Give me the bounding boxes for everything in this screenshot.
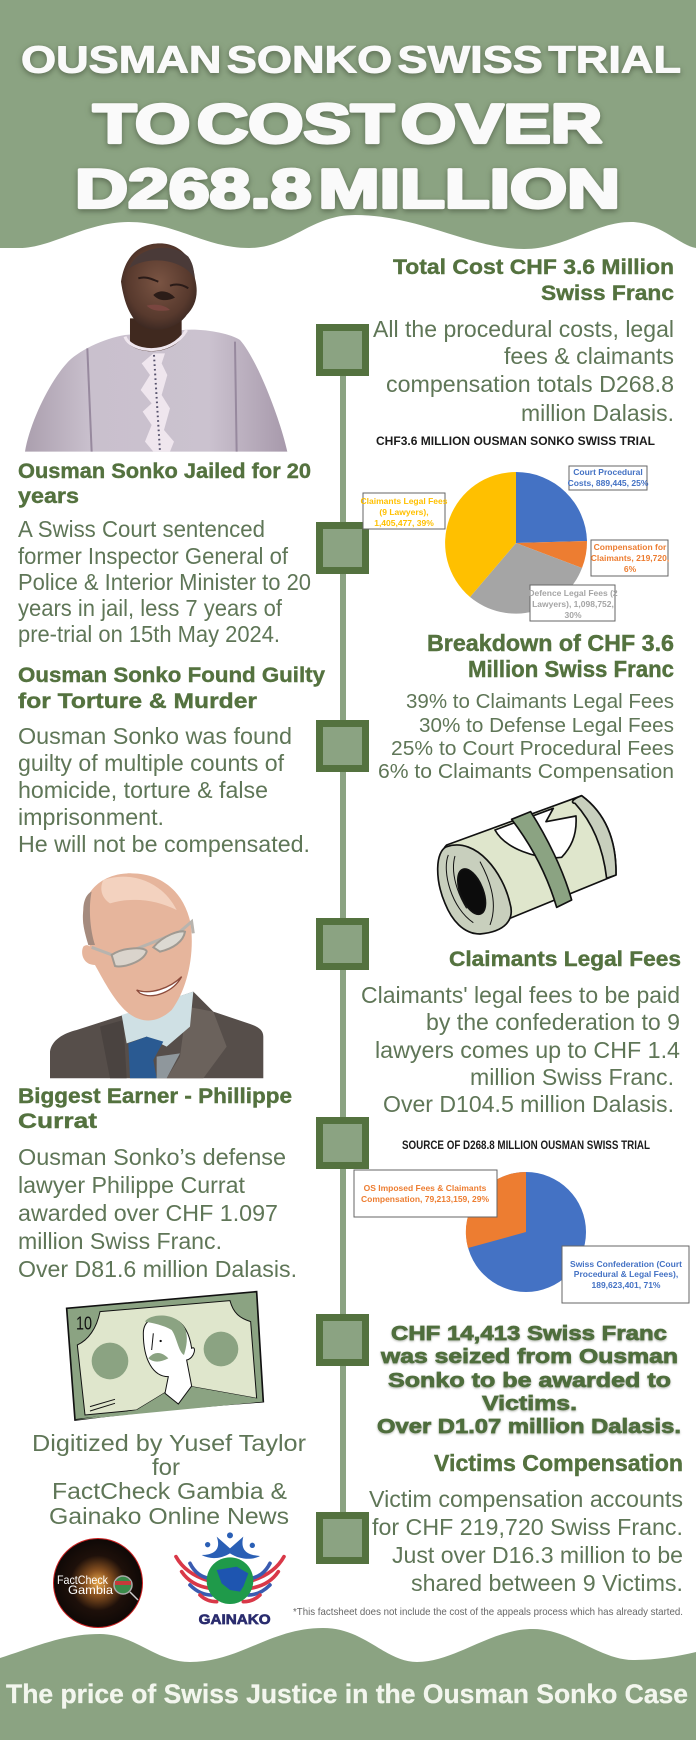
pie chart: CHF3.6 million breakdown: Claimants, 219,720, <box>591 553 669 563</box>
section: jailed: years in jail, less 7 years of <box>18 595 283 621</box>
pie chart: CHF3.6 million breakdown: (9 Lawyers), <box>379 507 429 517</box>
section: breakdown: Million Swiss Franc <box>468 656 674 682</box>
section: claimants legal fees: Claimants' legal fees to be paid <box>361 982 680 1008</box>
section: claimants legal fees: Over D104.5 million Dalasis. <box>383 1091 674 1117</box>
section: biggest earner: Biggest Earner - Phillippe <box>18 1085 292 1108</box>
section: jailed: A Swiss Court sentenced <box>18 516 265 542</box>
section: found guilty <box>18 664 325 857</box>
pie chart: source of funds: Compensation, 79,213,159, 29% <box>361 1194 489 1204</box>
pie chart: CHF3.6 million breakdown: Defence Legal Fees (2 <box>528 588 618 598</box>
pie chart: CHF3.6 million breakdown: 6% <box>624 564 637 574</box>
section: found guilty: for Torture & Murder <box>18 690 257 713</box>
title: TO COST OVER <box>93 92 602 154</box>
footer text: The price of Swiss Justice in the Ousman Sonko Case <box>6 1679 688 1709</box>
section: biggest earner: Currat <box>18 1110 97 1133</box>
header banner <box>0 0 696 249</box>
timeline <box>320 328 366 1560</box>
section: breakdown <box>378 630 674 783</box>
pie chart: CHF3.6 million breakdown: 30% <box>564 610 582 620</box>
section: total cost: compensation totals D268.8 <box>386 371 674 397</box>
section: jailed: Ousman Sonko Jailed for 20 <box>18 460 311 483</box>
section: breakdown: 6% to Claimants Compensation <box>378 760 674 783</box>
callout: seized funds: Over D1.07 million Dalasis. <box>377 1416 681 1438</box>
pie chart: source of funds <box>354 1138 689 1303</box>
section: claimants legal fees: Claimants Legal Fees <box>449 948 681 971</box>
section: total cost <box>373 256 674 426</box>
section: jailed <box>18 460 311 647</box>
pie chart: CHF3.6 million breakdown: Lawyers), 1,098,752, <box>532 599 614 609</box>
callout: seized funds <box>377 1323 681 1438</box>
section: victims compensation: for CHF 219,720 Swiss Franc. <box>372 1514 683 1540</box>
pie chart: CHF3.6 million breakdown <box>361 434 669 621</box>
photo: Ousman Sonko <box>25 243 287 452</box>
pie chart: CHF3.6 million breakdown: Compensation for <box>594 542 667 552</box>
callout: seized funds: CHF 14,413 Swiss Franc <box>391 1323 667 1345</box>
section: total cost: Swiss Franc <box>541 282 674 305</box>
icon: money roll <box>438 796 616 934</box>
section: breakdown: 39% to Claimants Legal Fees <box>406 690 674 713</box>
section: breakdown: 25% to Court Procedural Fees <box>391 737 674 760</box>
section: jailed: years <box>18 485 79 508</box>
title <box>21 40 681 220</box>
photo: Philippe Currat <box>50 873 263 1078</box>
section: total cost: million Dalasis. <box>521 400 674 426</box>
section: victims compensation: Victims Compensation <box>434 1450 683 1476</box>
callout: seized funds: Sonko to be awarded to <box>388 1370 671 1392</box>
section: total cost: All the procedural costs, legal <box>373 316 674 342</box>
section: found guilty: imprisonment. <box>18 804 164 830</box>
section: breakdown: 30% to Defense Legal Fees <box>419 714 674 737</box>
logo: Gainako: GAINAKO <box>199 1611 271 1627</box>
icon: banknote <box>67 1292 263 1420</box>
callout: seized funds: Victims. <box>482 1393 577 1415</box>
section: total cost: fees & claimants <box>504 343 674 369</box>
credit text: for <box>152 1454 180 1480</box>
section: total cost: Total Cost CHF 3.6 Million <box>393 256 674 279</box>
credit text: Digitized by Yusef Taylor <box>32 1430 306 1456</box>
pie chart: CHF3.6 million breakdown: Costs, 889,445, 25% <box>568 478 649 488</box>
pie chart: source of funds: Swiss Confederation (Court <box>570 1259 682 1269</box>
section: found guilty: guilty of multiple counts of <box>18 750 285 776</box>
section: victims compensation: Just over D16.3 million to be <box>392 1542 683 1568</box>
pie chart: CHF3.6 million breakdown: CHF3.6 MILLION OUSMAN SONKO SWISS TRIAL <box>376 434 655 448</box>
section: breakdown: Breakdown of CHF 3.6 <box>427 630 674 656</box>
logo: FactCheck Gambia: Gambia <box>68 1583 113 1597</box>
section: jailed: pre-trial on 15th May 2024. <box>18 621 280 647</box>
pie chart: source of funds: Procedural & Legal Fees), <box>574 1269 678 1279</box>
title: OUSMAN SONKO SWISS TRIAL <box>21 40 681 82</box>
section: found guilty: He will not be compensated. <box>18 831 310 857</box>
pie chart: source of funds: 189,623,401, 71% <box>591 1280 661 1290</box>
pie chart: source of funds: OS Imposed Fees & Claimants <box>364 1183 487 1193</box>
credit text <box>32 1430 306 1529</box>
section: victims compensation <box>369 1450 683 1596</box>
section: jailed: Police & Interior Minister to 20 <box>18 569 311 595</box>
section: claimants legal fees <box>361 948 681 1117</box>
logo: FactCheck Gambia: FactCheck <box>57 1573 109 1587</box>
section: claimants legal fees: by the confederation to 9 <box>426 1009 680 1035</box>
section: found guilty: Ousman Sonko Found Guilty <box>18 664 325 687</box>
section: biggest earner: million Swiss Franc. <box>18 1228 222 1254</box>
title: D268.8 MILLION <box>75 158 620 220</box>
section: biggest earner: awarded over CHF 1.097 <box>18 1200 278 1226</box>
section: found guilty: Ousman Sonko was found <box>18 723 292 749</box>
logo: Gainako <box>176 1532 284 1627</box>
section: claimants legal fees: lawyers comes up to CHF 1.4 <box>375 1037 680 1063</box>
footer banner <box>0 1628 696 1740</box>
pie chart: CHF3.6 million breakdown: Claimants Legal Fees <box>361 496 448 506</box>
section: victims compensation: Victim compensation accounts <box>369 1486 683 1512</box>
section: jailed: former Inspector General of <box>18 543 289 569</box>
section: found guilty: homicide, torture & false <box>18 777 268 803</box>
section: biggest earner: Over D81.6 million Dalasis. <box>18 1256 297 1282</box>
section: victims compensation: shared between 9 Victims. <box>411 1570 683 1596</box>
section: biggest earner: Ousman Sonko’s defense <box>18 1144 286 1170</box>
pie chart: CHF3.6 million breakdown: 1,405,477, 39% <box>374 518 434 528</box>
icon: banknote: 10 <box>76 1312 92 1333</box>
credit text: FactCheck Gambia & <box>52 1478 287 1504</box>
logo: FactCheck Gambia <box>54 1538 142 1628</box>
section: biggest earner <box>18 1085 297 1282</box>
pie chart: CHF3.6 million breakdown: Court Procedural <box>573 467 643 477</box>
section: biggest earner: lawyer Philippe Currat <box>18 1172 246 1198</box>
section: claimants legal fees: million Swiss Franc. <box>470 1064 674 1090</box>
credit text: Gainako Online News <box>49 1503 289 1529</box>
callout: seized funds: was seized from Ousman <box>380 1346 678 1368</box>
